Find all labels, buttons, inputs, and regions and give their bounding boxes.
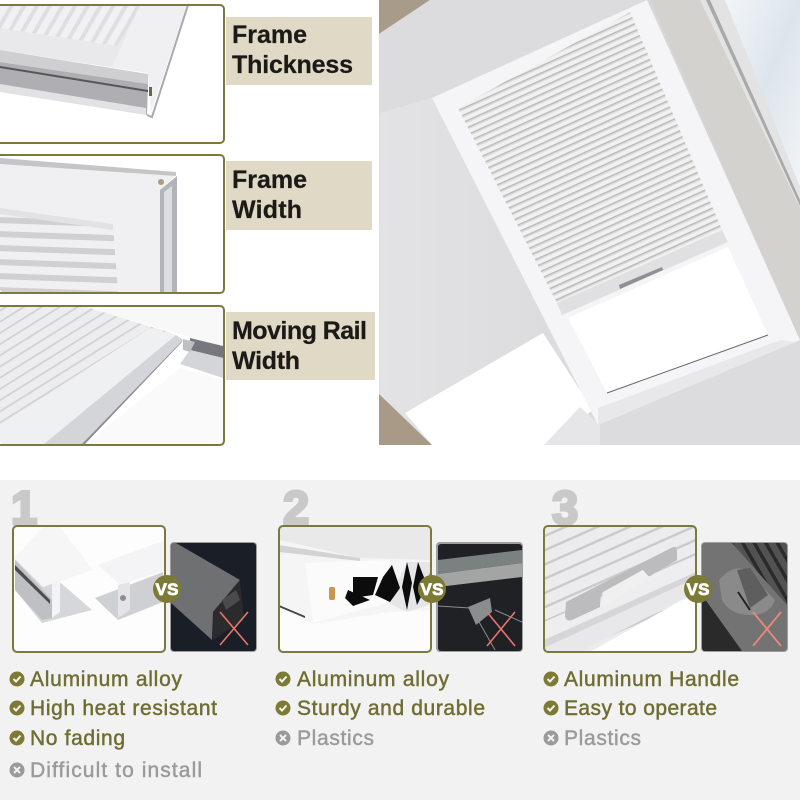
feature list: column 2: Plastics bbox=[297, 727, 374, 750]
label: frame width: Width bbox=[232, 196, 302, 224]
label: frame width: Frame bbox=[232, 166, 307, 194]
section 3: competitor photo with red cross bbox=[701, 542, 788, 652]
panel: frame thickness photo bbox=[0, 5, 224, 143]
panel: frame width photo bbox=[0, 155, 224, 293]
label: moving rail width: Moving Rail bbox=[232, 317, 367, 345]
feature list: column 3 bbox=[544, 668, 739, 750]
section 3: number: 3 bbox=[552, 481, 578, 534]
section 2: panel cellular fabric end bbox=[279, 526, 431, 652]
bottom rail bbox=[557, 230, 728, 315]
section 3: vs badge: VS bbox=[686, 580, 710, 599]
section 2: vs badge bbox=[418, 575, 446, 603]
section 2: competitor photo with red cross bbox=[436, 542, 523, 652]
feature list: column 3: Easy to operate bbox=[564, 697, 717, 720]
section 1: vs badge: VS bbox=[156, 580, 178, 599]
photo: skylight with cellular blind bbox=[379, 0, 800, 445]
section 1: vs badge bbox=[153, 575, 181, 603]
feature list: column 2 bbox=[276, 668, 485, 750]
feature list: column 2: Sturdy and durable bbox=[297, 697, 485, 720]
feature list: column 1: Aluminum alloy bbox=[30, 668, 182, 691]
panel: moving rail width photo bbox=[0, 306, 224, 445]
label: moving rail width bbox=[226, 312, 375, 380]
handle bbox=[619, 267, 663, 289]
background: bottom comparison band bbox=[0, 480, 800, 800]
section 2: number: 2 bbox=[283, 481, 309, 534]
pleated shade bbox=[458, 12, 722, 303]
section 1: number: 1 bbox=[11, 481, 37, 534]
feature list: column 1 bbox=[10, 668, 217, 782]
section 3: vs badge bbox=[684, 575, 712, 603]
section 1: competitor photo with red cross bbox=[170, 542, 257, 652]
section 1: panel aluminium profile bbox=[13, 526, 165, 652]
label: moving rail width: Width bbox=[232, 347, 300, 375]
label: frame thickness: Thickness bbox=[232, 51, 353, 79]
window frame bbox=[432, 0, 800, 425]
feature list: column 2: Aluminum alloy bbox=[297, 668, 450, 691]
open glass bbox=[568, 247, 768, 393]
label: frame width bbox=[226, 161, 372, 230]
label: frame thickness: Frame bbox=[232, 21, 307, 49]
section 2: vs badge: VS bbox=[420, 580, 444, 599]
feature list: column 1: Difficult to install bbox=[30, 759, 202, 782]
feature list: column 1: High heat resistant bbox=[30, 697, 217, 720]
feature list: column 3: Aluminum Handle bbox=[564, 668, 739, 691]
section 3: panel aluminium handle bbox=[544, 526, 696, 652]
feature list: column 3: Plastics bbox=[564, 727, 641, 750]
feature list: column 1: No fading bbox=[30, 727, 125, 750]
label: frame thickness bbox=[226, 17, 372, 85]
